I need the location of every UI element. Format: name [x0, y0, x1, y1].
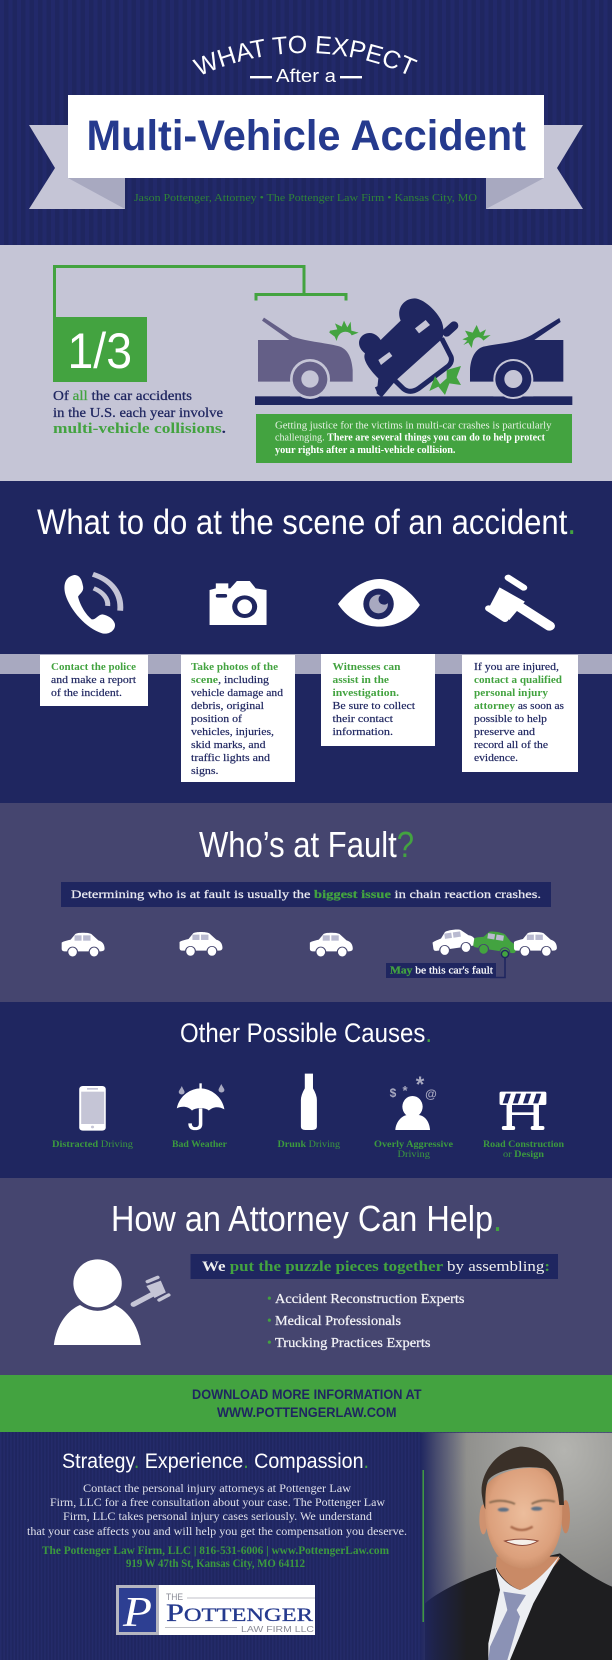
- label: distracted driving: Distracted Driving: [52, 1140, 133, 1150]
- stat box: one third: [53, 317, 147, 382]
- heading: How an Attorney Can Help.: [111, 1198, 502, 1239]
- chain reaction cars: [431, 927, 557, 960]
- label: overly aggressive driving: [374, 1140, 453, 1160]
- label: overly aggressive driving: Overly Aggressive: [374, 1140, 453, 1150]
- road: [255, 396, 572, 405]
- label: drunk driving: Drunk Driving: [278, 1140, 340, 1150]
- icon: aggressive driver: $: [390, 1086, 397, 1100]
- fault tag: [386, 950, 509, 978]
- panel: who's at fault: [0, 803, 612, 1002]
- icon: attorney with gavel: [54, 1259, 169, 1345]
- callout: getting justice: Getting justice for the victims in multi-car crashes is particularly: [275, 421, 552, 432]
- heading: Other Possible Causes.: [180, 1018, 432, 1048]
- stat text: [53, 388, 226, 437]
- contact paragraph: Contact the personal injury attorneys at Pottenger Law: [83, 1481, 351, 1495]
- ribbon banner: [29, 95, 583, 209]
- contact paragraph: [27, 1481, 407, 1538]
- icon: car 3: [310, 933, 353, 957]
- logo: the pottenger law firm: [116, 1585, 315, 1636]
- label: road construction or design: or Design: [503, 1150, 545, 1160]
- panel: header: [0, 0, 608, 245]
- card: contact the police: [40, 655, 148, 706]
- firm contact details: The Pottenger Law Firm, LLC | 816-531-6006 | www.PottengerLaw.com: [42, 1543, 389, 1557]
- card: witnesses: [321, 654, 435, 746]
- stat text: multi-vehicle collisions .: [53, 421, 226, 437]
- neck: [496, 1557, 560, 1590]
- contact paragraph: that your case affects you and will help you get the compensation you deserve.: [27, 1524, 407, 1538]
- logo: the pottenger law firm: POTTENGER: [166, 1600, 313, 1627]
- green divider: [422, 1470, 424, 1622]
- panel: download call to action: DOWNLOAD MORE INFORMATION AT: [192, 1386, 422, 1402]
- label: bad weather: Bad Weather: [172, 1140, 228, 1150]
- icon: eye: [338, 579, 420, 627]
- label: overly aggressive driving: Driving: [398, 1150, 430, 1160]
- banner: puzzle pieces: We put the puzzle pieces together by assembling :: [202, 1259, 550, 1275]
- ears: [479, 1504, 487, 1534]
- hair: [482, 1447, 564, 1509]
- list of experts: •: [267, 1291, 272, 1306]
- icon: phone: [64, 574, 120, 634]
- left car: [258, 318, 353, 399]
- title: Multi-Vehicle Accident: [86, 112, 526, 160]
- flipped car: [359, 298, 454, 397]
- heading: after a: [250, 66, 362, 86]
- suit: [425, 1553, 612, 1660]
- logo: the pottenger law firm: THE: [166, 1592, 183, 1603]
- icon: car 2: [180, 932, 222, 957]
- contact paragraph: Firm, LLC for a free consultation about your case. The Pottenger Law: [50, 1495, 385, 1509]
- list of experts: [267, 1291, 464, 1350]
- fault banner: [61, 882, 551, 907]
- card: if you are injured: possible to help: [474, 714, 547, 725]
- card: take photos: traffic lights and: [191, 753, 271, 764]
- card: take photos: signs.: [191, 766, 218, 777]
- bracket connector: [54, 266, 346, 318]
- card: if you are injured: record all of the: [474, 740, 548, 751]
- list of experts: Medical Professionals: [275, 1313, 401, 1328]
- icon: aggressive driver: [390, 1072, 437, 1130]
- panel: statistic: [0, 245, 612, 481]
- tie: [488, 1592, 526, 1660]
- callout: getting justice: challenging. There are several things you can do to help protect: [275, 433, 546, 444]
- fault banner: Determining who is at fault is usually the biggest issue in chain reaction crashes.: [71, 887, 541, 901]
- card: if you are injured: preserve and: [474, 727, 536, 738]
- card: take photos: scene , including: [191, 675, 270, 686]
- card: witnesses: information.: [332, 727, 393, 738]
- face: [485, 1468, 562, 1569]
- card: if you are injured: If you are injured,: [474, 662, 559, 673]
- card: take photos: vehicle damage and: [191, 688, 284, 699]
- card: contact the police: of the incident.: [51, 688, 122, 699]
- byline: Jason Pottenger, Attorney • The Pottenger Law Firm • Kansas City, MO: [134, 192, 477, 204]
- right car: [470, 318, 563, 399]
- card: if you are injured: personal injury: [474, 688, 549, 699]
- logo: the pottenger law firm: P: [122, 1590, 152, 1636]
- smile: [505, 1539, 538, 1545]
- stat box: one third: 1/3: [68, 323, 132, 379]
- panel: what to do at the scene: [0, 481, 612, 803]
- card: take photos: debris, original: [191, 701, 264, 712]
- card: witnesses: their contact: [332, 714, 393, 725]
- icon: umbrella: [177, 1083, 224, 1129]
- heading: after a: After a: [276, 66, 337, 86]
- card: witnesses: Witnesses can: [332, 662, 401, 673]
- callout: getting justice: [256, 414, 572, 463]
- list of experts: •: [267, 1335, 272, 1350]
- stat text: Of all the car accidents: [53, 388, 192, 403]
- firm contact details: 919 W 47th St, Kansas City, MO 64112: [126, 1556, 305, 1570]
- icon: smartphone: [79, 1086, 106, 1131]
- firm contact details: [42, 1543, 389, 1570]
- icon: aggressive driver: @: [425, 1087, 437, 1101]
- photo: attorney portrait: [420, 1433, 612, 1660]
- label: road construction or design: [483, 1140, 565, 1160]
- card: if you are injured: evidence.: [474, 753, 518, 764]
- callout: getting justice: your rights after a multi-vehicle collision.: [275, 445, 456, 456]
- list of experts: Trucking Practices Experts: [275, 1335, 430, 1350]
- logo: the pottenger law firm: LAW FIRM LLC: [241, 1625, 314, 1634]
- stat text: in the U.S. each year involve: [53, 405, 223, 420]
- heading: what to expect: WHAT TO EXPECT: [192, 36, 418, 74]
- card: contact the police: and make a report: [51, 675, 136, 686]
- card: if you are injured: attorney as soon as: [474, 701, 564, 712]
- icon: camera: [210, 581, 267, 625]
- heading: Who’s at Fault?: [199, 824, 414, 865]
- panel: footer: [0, 1432, 612, 1660]
- panel: download call to action: WWW.POTTENGERLAW.COM: [217, 1404, 396, 1420]
- panel: other possible causes: [0, 1002, 612, 1178]
- fault tag: May be this car's fault: [390, 966, 493, 976]
- panel: download call to action: [0, 1375, 612, 1432]
- card: take photos: skid marks, and: [191, 740, 266, 751]
- card: take photos: Take photos of the: [191, 662, 278, 673]
- list of experts: Accident Reconstruction Experts: [275, 1291, 464, 1306]
- icon: aggressive driver: *: [402, 1083, 408, 1098]
- label: road construction or design: Road Construction: [483, 1140, 565, 1150]
- contact paragraph: Firm, LLC takes personal injury cases seriously. We understand: [63, 1509, 372, 1523]
- card: take photos: [181, 655, 295, 782]
- card: take photos: position of: [191, 714, 243, 725]
- illustration: car crash: [255, 298, 572, 405]
- card: witnesses: Be sure to collect: [332, 701, 415, 712]
- fade into background: [420, 1433, 467, 1660]
- list of experts: •: [267, 1313, 272, 1328]
- card: contact the police: Contact the police: [51, 662, 136, 673]
- card: if you are injured: contact a qualified: [474, 675, 562, 686]
- panel: how an attorney can help: [0, 1178, 612, 1375]
- banner: puzzle pieces: [190, 1254, 558, 1279]
- impact sparks: [329, 321, 491, 395]
- icon: bottle: [301, 1074, 317, 1130]
- card: if you are injured: [462, 655, 578, 772]
- icon: road barrier: [500, 1092, 546, 1130]
- card: take photos: vehicles, injuries,: [191, 727, 274, 738]
- heading: strategy experience compassion: Strategy. Experience. Compassion.: [62, 1450, 369, 1473]
- shirt: [488, 1555, 560, 1660]
- brows and eyes: [489, 1500, 555, 1530]
- icon: aggressive driver: *: [416, 1072, 425, 1097]
- icon: car 1: [62, 933, 105, 957]
- icon: gavel: [489, 578, 549, 626]
- card: witnesses: assist in the: [332, 675, 389, 686]
- card: witnesses: investigation.: [332, 688, 399, 699]
